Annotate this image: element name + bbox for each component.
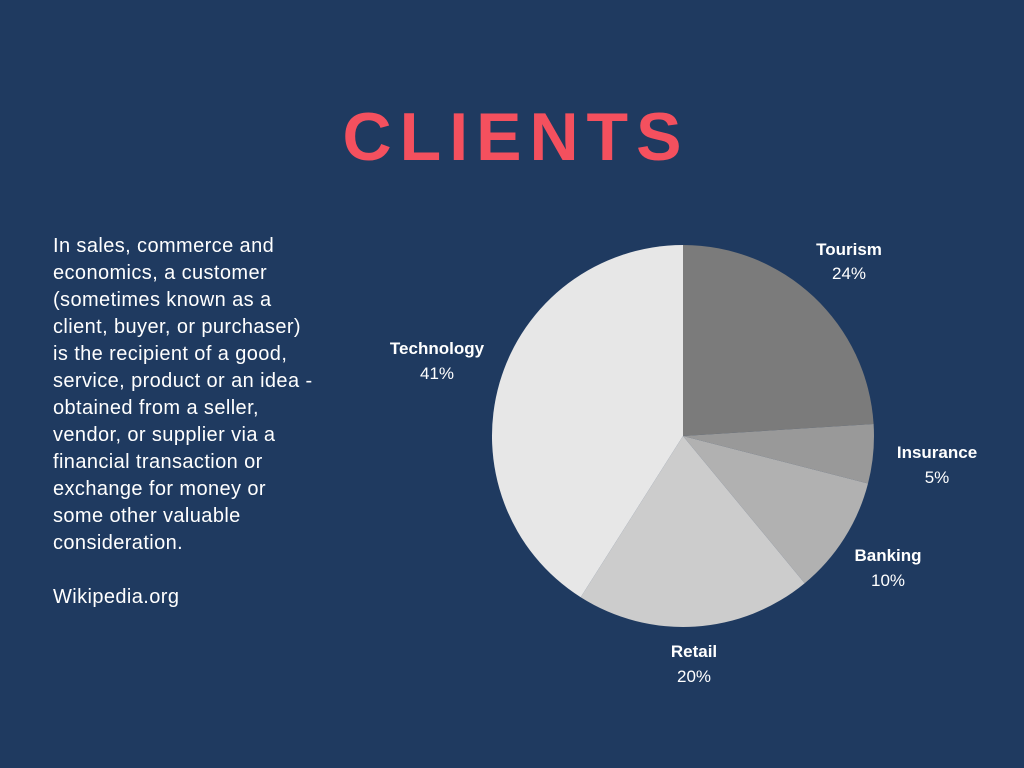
slice: technology	[492, 245, 683, 597]
slice: insurance	[683, 424, 874, 484]
text block: definition: vendor, or supplier via a	[53, 424, 275, 446]
text block: definition: client, buyer, or purchaser)	[53, 316, 301, 338]
text block: definition: service, product or an idea -	[53, 370, 313, 392]
text block: definition: economics, a customer	[53, 262, 267, 284]
text block: definition: In sales, commerce and	[53, 235, 274, 257]
label: tourism: 24%	[832, 264, 866, 283]
slice: retail	[581, 436, 805, 627]
text block: definition: financial transaction or	[53, 451, 263, 473]
label: banking: Banking	[854, 546, 922, 565]
label: retail: 20%	[677, 667, 711, 686]
text block: definition: exchange for money or	[53, 478, 266, 500]
text block: definition: is the recipient of a good,	[53, 343, 287, 365]
label: retail: Retail	[671, 642, 717, 661]
label: tourism	[816, 240, 882, 283]
label: tourism: Tourism	[816, 240, 882, 259]
text block: definition	[53, 235, 313, 608]
text block: definition: Wikipedia.org	[53, 586, 179, 608]
label: retail	[671, 642, 717, 686]
label: technology: 41%	[420, 364, 454, 383]
text block: definition: obtained from a seller,	[53, 397, 259, 419]
label: banking	[854, 546, 922, 590]
title: CLIENTS	[343, 99, 689, 175]
slice: banking	[683, 436, 868, 583]
label: insurance: Insurance	[897, 443, 977, 462]
text block: definition: some other valuable	[53, 505, 241, 527]
label: technology: Technology	[390, 339, 485, 358]
text block: definition: consideration.	[53, 532, 183, 554]
slice: tourism	[683, 245, 874, 436]
label: banking: 10%	[871, 571, 905, 590]
label: insurance: 5%	[925, 468, 949, 487]
label: insurance	[897, 443, 977, 487]
text block: definition: (sometimes known as a	[53, 289, 271, 311]
label: technology	[390, 339, 485, 383]
